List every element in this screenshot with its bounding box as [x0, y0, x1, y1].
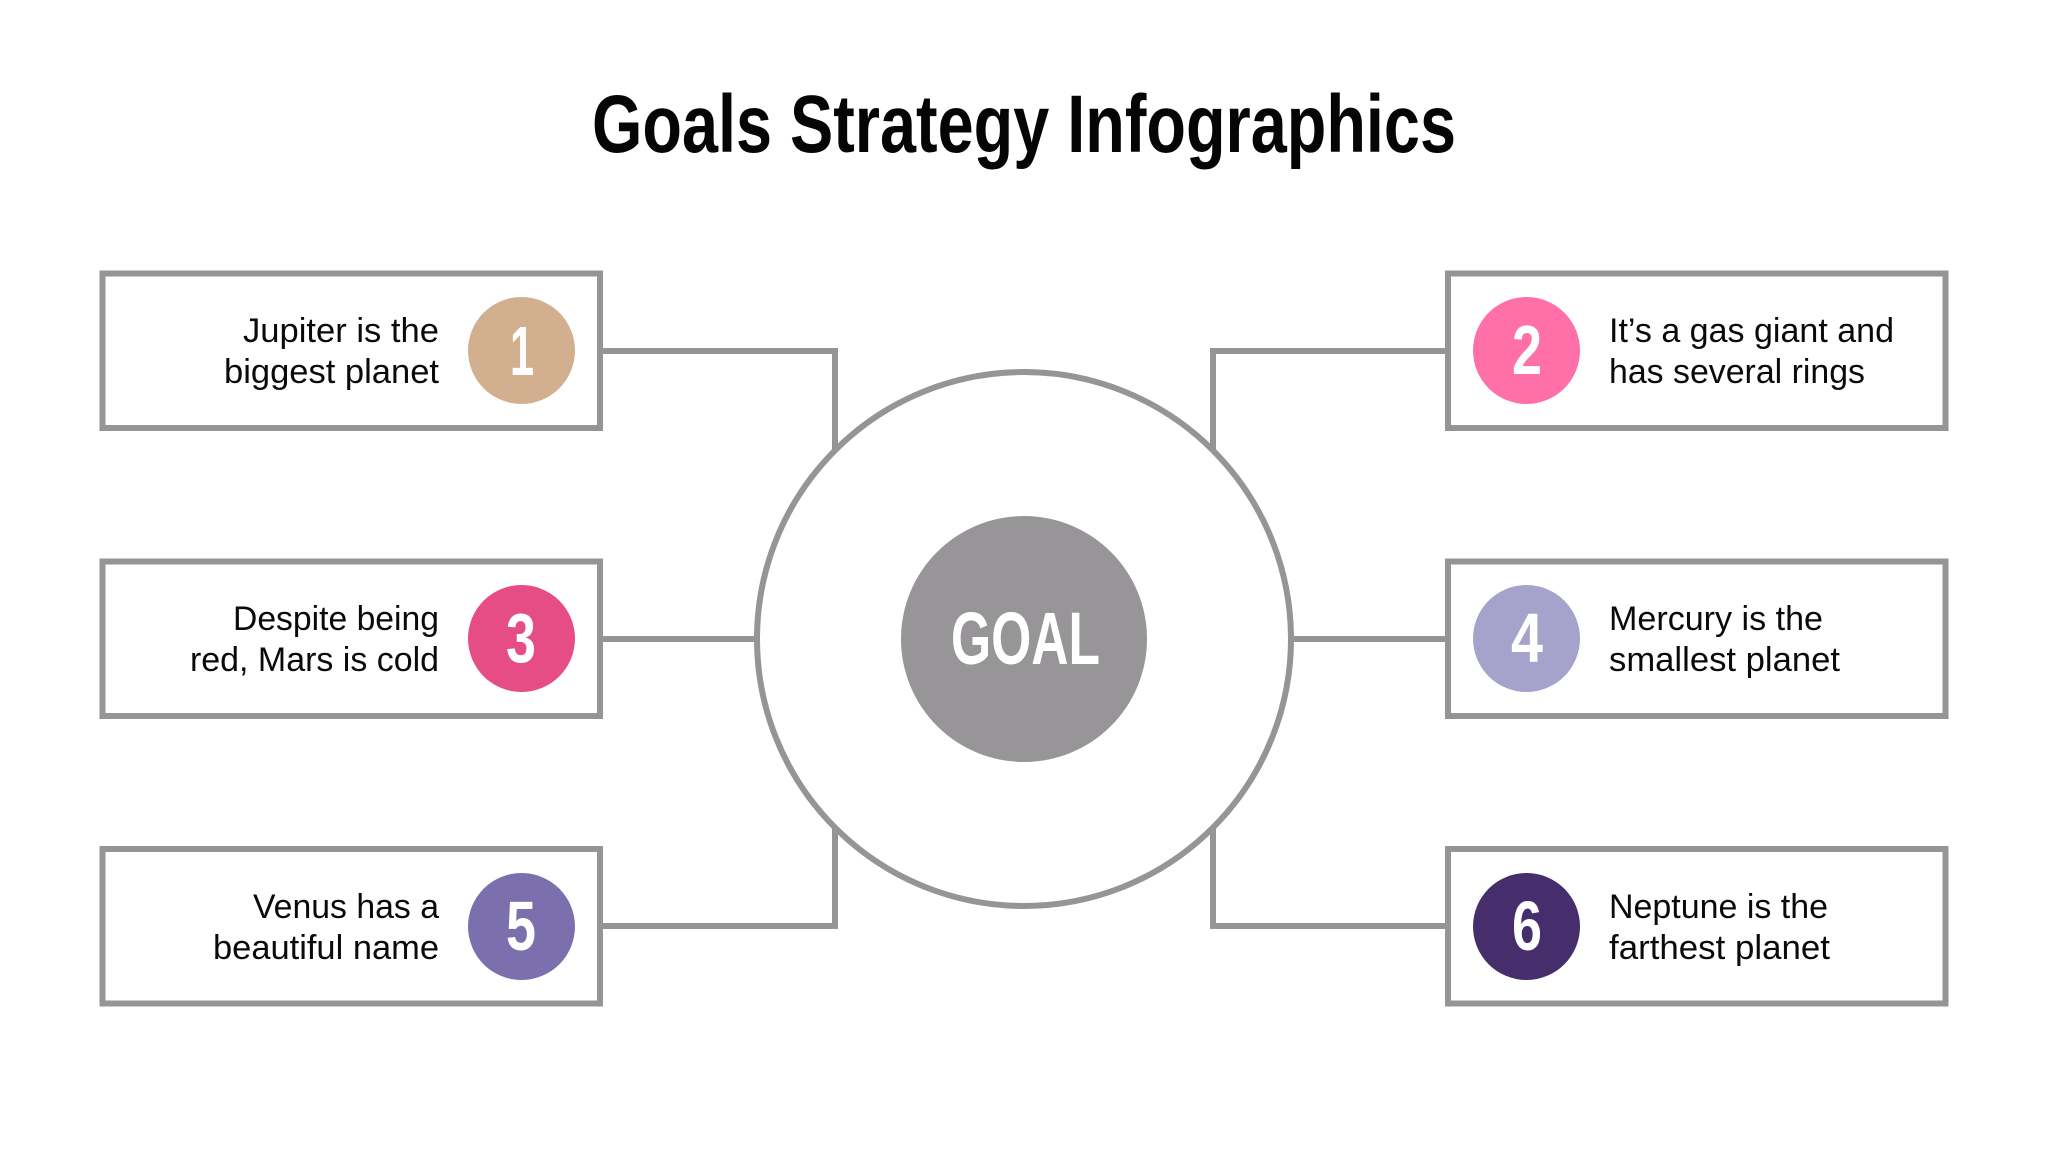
text: goal 3: Despite being	[233, 600, 439, 638]
text: goal 5: Venus has a	[253, 888, 439, 926]
text: goal 2: has several rings	[1609, 353, 1865, 391]
badge: 1: 1	[510, 312, 534, 390]
panel: goal 4	[1448, 562, 1946, 716]
central goal diagram	[757, 372, 1291, 906]
connector: box 4 to goal circle	[1291, 636, 1448, 642]
panel: goal 1	[102, 274, 600, 428]
badge: 6	[1473, 873, 1580, 980]
text: goal 6: farthest planet	[1609, 929, 1831, 967]
badge: 5	[468, 873, 575, 980]
panel: goal 5	[102, 849, 600, 1004]
badge: 1	[468, 297, 575, 404]
badge: 5: 5	[506, 887, 536, 965]
text: goal 4: smallest planet	[1609, 641, 1841, 679]
panel: goal 2	[1448, 274, 1946, 428]
text: goal 2	[1609, 312, 1894, 391]
connector: box 3 to goal circle	[600, 636, 757, 642]
badge: 4	[1473, 585, 1580, 692]
text: goal 6	[1609, 888, 1831, 967]
outer ring	[757, 372, 1291, 906]
connector: box 5 to goal circle	[600, 828, 835, 926]
text: goal 5: beautiful name	[213, 929, 439, 967]
badge: 4: 4	[1511, 599, 1543, 677]
goal label: GOAL	[951, 597, 1100, 680]
title: Goals Strategy Infographics	[592, 79, 1456, 170]
text: goal 3: red, Mars is cold	[190, 641, 439, 679]
connector: box 6 to goal circle	[1213, 828, 1448, 926]
badge: 3	[468, 585, 575, 692]
badge: 2	[1473, 297, 1580, 404]
text: goal 1	[224, 312, 440, 391]
connector: box 2 to goal circle	[1213, 351, 1448, 450]
panel: goal 6	[1448, 849, 1946, 1004]
badge: 6: 6	[1512, 887, 1542, 965]
text: goal 2: It’s a gas giant and	[1609, 312, 1894, 350]
text: goal 6: Neptune is the	[1609, 888, 1828, 926]
text: goal 1: Jupiter is the	[243, 312, 439, 350]
badge: 2: 2	[1512, 311, 1542, 389]
panel: goal 3	[102, 562, 600, 716]
text: goal 4	[1609, 600, 1841, 679]
badge: 3: 3	[506, 599, 536, 677]
text: goal 5	[213, 888, 439, 967]
connector: box 1 to goal circle	[600, 351, 835, 450]
text: goal 3	[190, 600, 439, 679]
text: goal 4: Mercury is the	[1609, 600, 1823, 638]
inner goal circle	[901, 516, 1147, 762]
text: goal 1: biggest planet	[224, 353, 440, 391]
